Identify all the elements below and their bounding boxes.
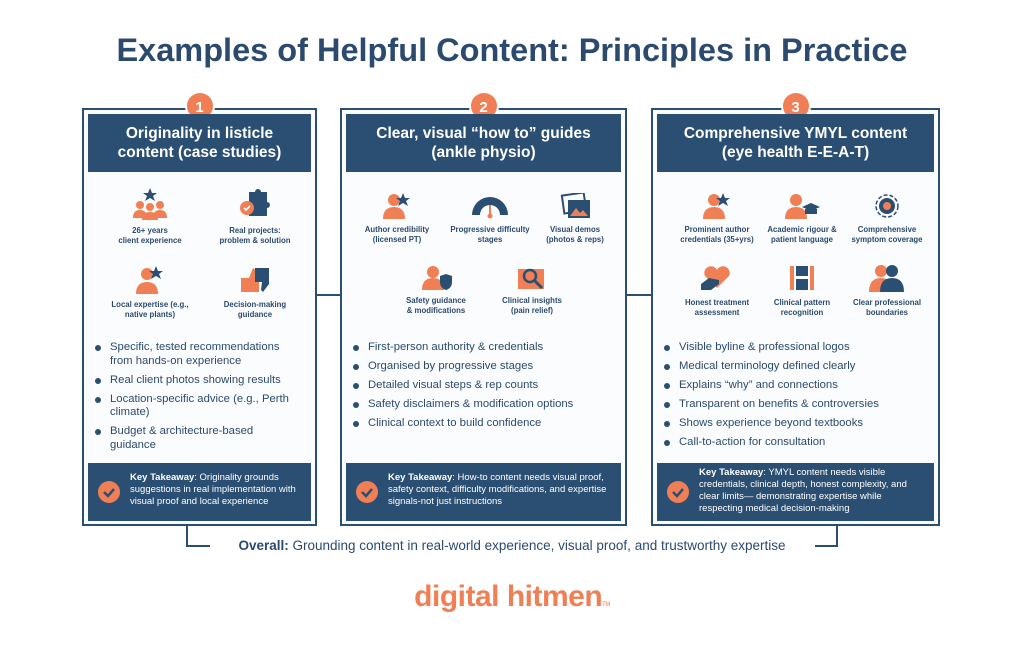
bullets 3: Transparent on benefits & controversies (679, 398, 879, 410)
icon: author credentials: Prominent author (684, 225, 749, 234)
icon: decision making (224, 268, 286, 319)
key takeaway 3 (657, 463, 934, 521)
icon: visual demos (546, 193, 604, 244)
icon: coverage (851, 194, 923, 244)
overall statement: Overall: Grounding content in real-world experience, visual proof, and trustworthy expertise (238, 538, 786, 553)
icon: real projects (219, 189, 291, 245)
bullets 2 (353, 341, 573, 429)
badge 2: 2 (479, 99, 488, 116)
header 2: (ankle physio) (431, 144, 536, 161)
icon: local expertise (111, 266, 189, 319)
header 1 (88, 114, 311, 172)
bullets 2: Safety disclaimers & modification options (368, 398, 573, 410)
icon: academic (767, 194, 837, 244)
icon: coverage: symptom coverage (851, 235, 923, 244)
bullets 2: Clinical context to build confidence (368, 417, 541, 429)
icon: pattern (774, 266, 830, 317)
icon: author credentials: credentials (35+yrs) (680, 235, 754, 244)
bullets 3 (664, 341, 879, 448)
badge 3 (780, 91, 810, 121)
header 3: Comprehensive YMYL content (684, 125, 907, 142)
badge 3: 3 (791, 99, 800, 116)
icon: pattern: Clinical pattern (774, 298, 830, 307)
icon: author credibility: (licensed PT) (373, 235, 421, 244)
bullets 2: Organised by progressive stages (368, 360, 533, 372)
icon: decision making: guidance (238, 310, 272, 319)
icon: academic: Academic rigour & (767, 225, 837, 234)
icon: client experience: client experience (118, 236, 182, 245)
icon: author credentials (680, 193, 754, 244)
header 2 (346, 114, 621, 172)
icon: client experience: 26+ years (132, 226, 168, 235)
icon: safety (406, 266, 466, 315)
bullets 2: Detailed visual steps & rep counts (368, 379, 538, 391)
icon: local expertise: Local expertise (e.g., (111, 300, 189, 309)
icon: pattern: recognition (781, 308, 823, 317)
icon: academic: patient language (771, 235, 833, 244)
icon: author credibility (365, 193, 430, 244)
connector lines (317, 294, 651, 296)
bullets 1: Budget & architecture-based guidance (110, 425, 253, 450)
key takeaway 2 (346, 463, 621, 521)
title: Examples of Helpful Content: Principles in Practice (116, 32, 908, 68)
icon: clinical insights (502, 268, 562, 315)
icon: boundaries: boundaries (866, 308, 908, 317)
header 1: Originality in listicle (126, 125, 273, 142)
icon: gauge (450, 197, 530, 244)
icon: honest assessment (685, 266, 749, 317)
header 2: Clear, visual “how to” guides (376, 125, 591, 142)
icon: safety: Safety guidance (406, 296, 466, 305)
bullets 1: Location-specific advice (e.g., Perth climate) (110, 392, 289, 418)
icon: real projects: problem & solution (219, 236, 291, 245)
icon: decision making: Decision-making (224, 300, 286, 309)
icon: coverage: Comprehensive (858, 225, 916, 234)
bullets 1: Specific, tested recommendations from hands-on experience (110, 341, 280, 366)
key takeaway 2: Key Takeaway: How-to content needs visual proof, safety context, difficulty modifications, and expertise signals-not just instructions (388, 472, 606, 507)
icon: gauge: Progressive difficulty (450, 225, 530, 234)
panel: originality (82, 108, 317, 526)
key takeaway 1 (88, 463, 311, 521)
bullets 2: First-person authority & credentials (368, 341, 543, 353)
key takeaway 1: Key Takeaway: Originality grounds suggestions in real implementation with visual proof and local experience (130, 472, 296, 507)
logo: digital hitmenTM (414, 580, 610, 613)
header 3 (657, 114, 934, 172)
overall bracket (186, 526, 838, 547)
icon: real projects: Real projects: (229, 226, 281, 235)
icon: gauge: stages (478, 235, 502, 244)
icon: visual demos: (photos & reps) (546, 235, 604, 244)
panel: YMYL (651, 108, 940, 526)
icon: safety: & modifications (407, 306, 465, 315)
bullets 3: Explains “why” and connections (679, 379, 838, 391)
icon: clinical insights: Clinical insights (502, 296, 562, 305)
icon: clinical insights: (pain relief) (511, 306, 553, 315)
bullets 1: Real client photos showing results (110, 374, 281, 386)
bullets 3: Call-to-action for consultation (679, 436, 825, 448)
bullets 3: Shows experience beyond textbooks (679, 417, 863, 429)
badge 2 (468, 91, 498, 121)
icon: author credibility: Author credibility (365, 225, 429, 234)
icon: visual demos: Visual demos (550, 225, 600, 234)
header 3: (eye health E-E-A-T) (722, 144, 869, 161)
icon: honest assessment: assessment (695, 308, 739, 317)
icon: boundaries: Clear professional (853, 298, 921, 307)
header 1: content (case studies) (118, 144, 281, 161)
panel: how-to guides (340, 108, 627, 526)
bullets 3: Medical terminology defined clearly (679, 360, 855, 372)
icon: client experience (118, 188, 182, 245)
badge 1 (184, 91, 214, 121)
badge 1: 1 (195, 99, 204, 116)
icon: boundaries (853, 265, 921, 317)
bullets 1 (95, 341, 289, 450)
icon: honest assessment: Honest treatment (685, 298, 749, 307)
bullets 3: Visible byline & professional logos (679, 341, 850, 353)
key takeaway 3: Key Takeaway: YMYL content needs visible credentials, clinical depth, honest complexity, and clear limits— demonstrating expertise while respecting medical decision-making (699, 467, 907, 514)
icon: local expertise: native plants) (125, 310, 175, 319)
